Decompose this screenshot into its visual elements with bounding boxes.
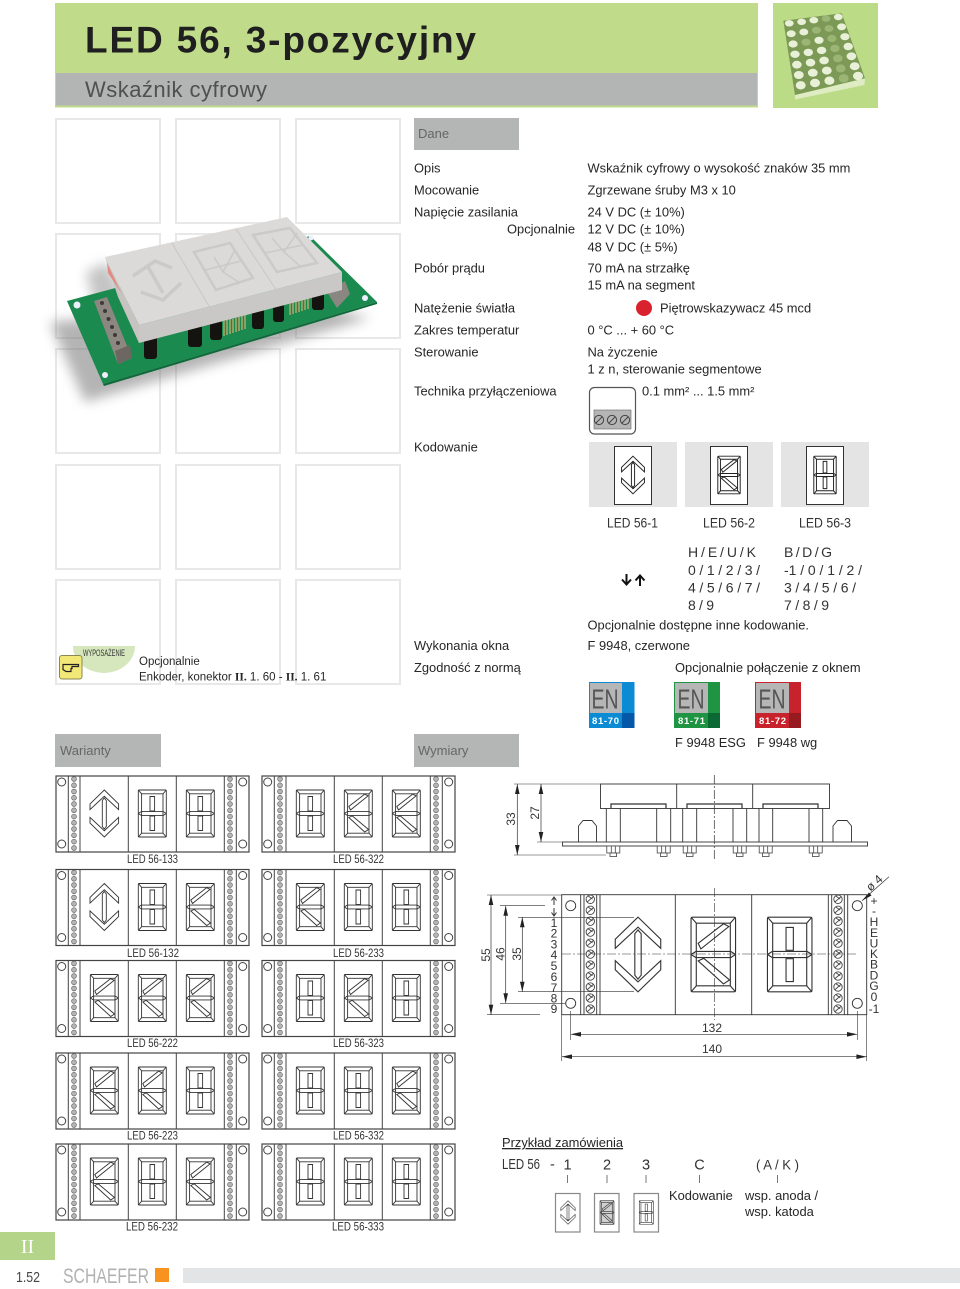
order example: LED 56 [502, 1157, 540, 1173]
terminal numbering: 2 [551, 926, 558, 940]
order example: wsp. katoda [744, 1204, 815, 1219]
data table: 12 V DC (± 10%) [588, 222, 685, 236]
data table: 70 mA na strzałkę [588, 260, 690, 276]
character set of LED 56-2: H / E / U / K [688, 544, 757, 560]
variant: LED 56-323 [262, 960, 455, 1050]
variant: LED 56-133 [56, 776, 249, 866]
variant: LED 56-333: LED 56-333 [332, 1222, 384, 1234]
window variant labels [675, 735, 817, 750]
character set of LED 56-3: -1 / 0 / 1 / 2 / [784, 562, 862, 578]
data table: Opcjonalnie dostępne inne kodowanie. [588, 618, 809, 632]
dimension drawing: side view [504, 775, 868, 860]
variant: LED 56-322: LED 56-322 [333, 854, 384, 866]
order example: - [550, 1157, 555, 1173]
terminal signal labels: H [870, 915, 878, 929]
dimension drawing: top view [479, 872, 889, 1061]
order example: 3 [642, 1158, 650, 1174]
data table: Wskaźnik cyfrowy o wysokość znaków 35 mm [588, 160, 850, 176]
character set of LED 56-2 [688, 544, 760, 613]
section tab: II [21, 1236, 34, 1258]
icon: down and up arrows [622, 574, 644, 586]
data table: Opcjonalnie [507, 222, 575, 236]
dimension label: 33: 33 [504, 812, 518, 826]
data table: Zgodność z normą [414, 660, 522, 675]
dimension labels: 132 [702, 1021, 722, 1035]
data table: 1 z n, sterowanie segmentowe [588, 362, 762, 376]
dimension labels: 55 [479, 948, 493, 962]
header banner [55, 3, 758, 108]
icon: LED dot matrix thumbnail [773, 3, 878, 108]
footer [0, 1232, 960, 1288]
order example: 1 [563, 1158, 572, 1174]
dimension labels: 35 [510, 947, 524, 961]
heading: Dane [414, 118, 519, 150]
terminal signal labels: G [869, 979, 879, 993]
dimension labels: ø 4 [863, 872, 886, 894]
variant: LED 56-332 [262, 1053, 455, 1142]
data table: Opis [414, 160, 441, 176]
data table [414, 160, 861, 675]
order example: Kodowanie [669, 1188, 733, 1203]
icon: red LED dot [636, 300, 652, 316]
EN badge 81-71: 81-71 [678, 716, 706, 727]
data table: Kodowanie [414, 440, 478, 454]
variant: LED 56-132 [56, 870, 249, 960]
data table: Sterowanie [414, 344, 478, 360]
EN badge 81-72: EN [758, 684, 786, 714]
terminal signal labels: + [870, 894, 878, 908]
variant: LED 56-323: LED 56-323 [333, 1038, 384, 1050]
order digit 1 [556, 1194, 580, 1232]
EN badge 81-70 [589, 682, 634, 728]
variant: LED 56-223 [56, 1053, 249, 1142]
coding option: LED 56-1: LED 56-1 [607, 514, 658, 530]
coding option: LED 56-2 [685, 442, 773, 530]
data table: Zakres temperatur [414, 322, 520, 338]
variant: LED 56-222: LED 56-222 [127, 1038, 178, 1050]
coding option: LED 56-1 [589, 442, 677, 530]
data table: Na życzenie [588, 344, 658, 360]
terminal signal labels: D [870, 968, 879, 982]
terminal numbering: 4 [551, 948, 558, 962]
terminal signal labels: 0 [871, 990, 878, 1004]
dimension labels [479, 872, 886, 1056]
EN badge 81-71: EN [678, 684, 704, 714]
terminal signal labels: U [870, 936, 878, 950]
character set of LED 56-3 [784, 544, 862, 613]
data table: 0 °C ... + 60 °C [588, 322, 674, 338]
terminal numbering: 9 [551, 1002, 558, 1016]
terminal numbering: 5 [551, 959, 558, 973]
terminal signal labels: B [870, 958, 878, 972]
data table: Natężenie światła [414, 300, 516, 316]
variant: LED 56-332: LED 56-332 [333, 1130, 384, 1142]
dimension labels: 140 [702, 1042, 722, 1056]
heading: Wymiary: Wymiary [418, 743, 469, 758]
data table: 48 V DC (± 5%) [588, 240, 678, 254]
terminal numbering: 7 [551, 981, 558, 995]
equipment note: Enkoder, konektor II. 1. 60 - II. 1. 61 [139, 672, 326, 684]
heading: Warianty [55, 734, 161, 767]
order example [502, 1135, 819, 1232]
coding option: LED 56-2: LED 56-2 [703, 514, 755, 530]
equipment note [60, 646, 326, 684]
order digit 2 [594, 1194, 619, 1232]
character set of LED 56-2: 8 / 9 [688, 597, 714, 613]
variant: LED 56-233: LED 56-233 [333, 948, 384, 960]
window variant labels: F 9948 ESG [675, 735, 746, 750]
data table: 15 mA na segment [588, 278, 695, 292]
character set of LED 56-2: 0 / 1 / 2 / 3 / [688, 562, 760, 578]
dimension labels: 46 [494, 947, 508, 961]
variant: LED 56-233 [262, 870, 455, 960]
window variant labels: F 9948 wg [757, 735, 817, 750]
variant: LED 56-232 [56, 1144, 249, 1234]
variant: LED 56-222 [56, 960, 249, 1050]
order example: ( A / K ) [756, 1156, 799, 1172]
character set of LED 56-3: B / D / G [784, 544, 832, 560]
page number: 1.52 [16, 1270, 40, 1286]
data table: 0.1 mm² ... 1.5 mm² [642, 384, 755, 398]
variant: LED 56-322 [262, 776, 455, 866]
data table: Wykonania okna [414, 638, 510, 653]
heading: Dane: Dane [418, 126, 449, 141]
dimension label: 27: 27 [528, 806, 542, 820]
order example: 2 [603, 1158, 611, 1174]
data table: Pobór prądu [414, 260, 485, 276]
variant: LED 56-132: LED 56-132 [127, 948, 179, 960]
terminal numbering: 3 [551, 938, 558, 952]
EN badge 81-72 [755, 682, 801, 728]
order example: C [694, 1158, 705, 1174]
variant: LED 56-133: LED 56-133 [127, 854, 178, 866]
variant: LED 56-232: LED 56-232 [126, 1222, 178, 1234]
variant: LED 56-333 [262, 1144, 455, 1234]
EN badge 81-70: EN [592, 684, 618, 714]
icon: pointing hand [60, 656, 82, 679]
terminal signal labels: K [870, 947, 878, 961]
terminal signal labels [869, 894, 880, 1016]
data table: 24 V DC (± 10%) [588, 204, 685, 220]
subtitle: Wskaźnik cyfrowy [85, 77, 267, 102]
data table: Mocowanie [414, 182, 479, 198]
coding option: LED 56-3: LED 56-3 [799, 514, 851, 530]
terminal signal labels: -1 [869, 1002, 880, 1016]
terminal numbering [551, 916, 558, 1016]
order example: wsp. anoda / [744, 1188, 819, 1203]
heading: Warianty: Warianty [60, 743, 111, 758]
coding option: LED 56-3 [781, 442, 869, 530]
data table: Napięcie zasilania [414, 204, 519, 220]
terminal numbering: 8 [551, 992, 558, 1006]
heading: Wymiary [414, 734, 519, 767]
background tile grid [56, 119, 400, 684]
terminal signal labels: - [872, 904, 876, 918]
data table: Opcjonalnie połączenie z oknem [675, 660, 861, 675]
terminal numbering: 6 [551, 970, 558, 984]
icon: screw terminal [590, 388, 636, 434]
character set of LED 56-2: 4 / 5 / 6 / 7 / [688, 580, 760, 596]
equipment note: WYPOSAŻENIE [83, 648, 125, 658]
order digit 3 [634, 1194, 658, 1232]
variant: LED 56-223: LED 56-223 [127, 1130, 178, 1142]
brand logo: SCHAEFER [63, 1265, 149, 1288]
terminal numbering: 1 [551, 916, 558, 930]
equipment note: Opcjonalnie [139, 656, 200, 668]
data table: Piętrowskazywacz 45 mcd [660, 300, 811, 316]
character set of LED 56-3: 7 / 8 / 9 [784, 597, 829, 613]
terminal signal labels: E [870, 926, 878, 940]
title: LED 56, 3-pozycyjny [85, 20, 476, 60]
EN badge 81-70: 81-70 [592, 716, 619, 727]
character set of LED 56-3: 3 / 4 / 5 / 6 / [784, 580, 856, 596]
data table: Zgrzewane śruby M3 x 10 [588, 182, 736, 198]
order example: Przykład zamówienia [502, 1135, 624, 1150]
EN badge 81-71 [674, 682, 720, 728]
data table: Technika przyłączeniowa [414, 384, 557, 398]
product photo: LED display module on green PCB [50, 217, 377, 402]
EN badge 81-72: 81-72 [759, 716, 786, 727]
section tab [0, 1232, 55, 1260]
data table: F 9948, czerwone [588, 638, 690, 653]
